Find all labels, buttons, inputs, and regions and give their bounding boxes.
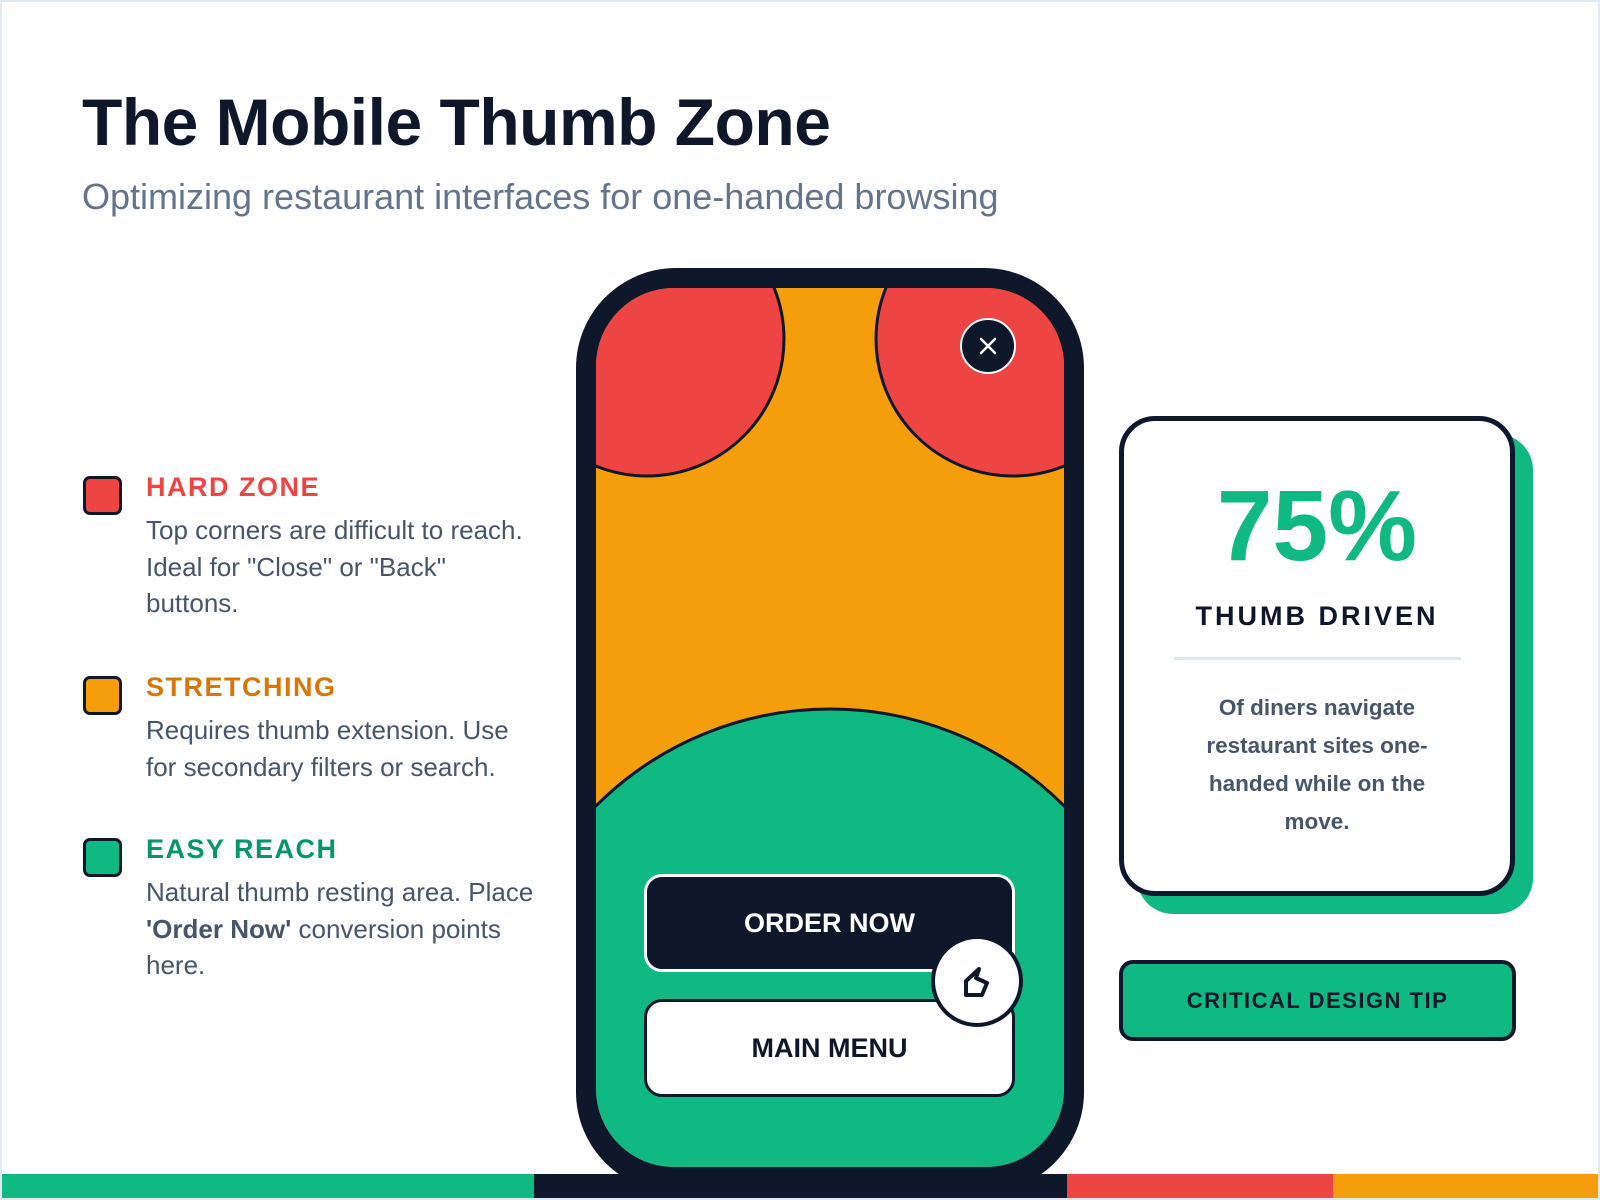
legend: stretching: STRETCHING <box>146 672 336 702</box>
icon: thumb tap <box>931 935 1023 1027</box>
main menu button <box>644 999 1015 1097</box>
order now button: ORDER NOW <box>744 908 915 938</box>
legend: stretching <box>83 672 509 782</box>
hard zone circles <box>596 288 1064 478</box>
subtitle: Optimizing restaurant interfaces for one-handed browsing <box>82 176 998 217</box>
legend: hard zone <box>83 472 523 618</box>
legend: hard zone: HARD ZONE <box>146 472 320 502</box>
bottom color bar <box>2 1174 1598 1198</box>
easy zone arc <box>596 708 1064 1167</box>
title: The Mobile Thumb Zone <box>82 85 830 159</box>
stat number: 75% <box>1217 470 1417 582</box>
stat description: Of diners navigate restaurant sites one-handed while on the move. <box>1206 695 1428 834</box>
legend: easy reach <box>83 834 533 980</box>
legend: easy reach: EASY REACH <box>146 834 338 864</box>
close button <box>960 318 1016 374</box>
legend: hard zone: Top corners are difficult to reach. Ideal for "Close" or "Back" buttons. <box>146 515 523 618</box>
legend: easy reach: Natural thumb resting area. Place 'Order Now' conversion points here. <box>146 877 533 980</box>
critical design tip button <box>1119 960 1516 1041</box>
main menu button: MAIN MENU <box>752 1033 908 1063</box>
stat card <box>1119 416 1533 914</box>
phone <box>576 268 1084 1192</box>
stat label: THUMB DRIVEN <box>1196 601 1438 631</box>
order now button <box>644 874 1015 972</box>
critical design tip button: CRITICAL DESIGN TIP <box>1187 988 1448 1013</box>
legend: stretching: Requires thumb extension. Use for secondary filters or search. <box>146 715 509 782</box>
